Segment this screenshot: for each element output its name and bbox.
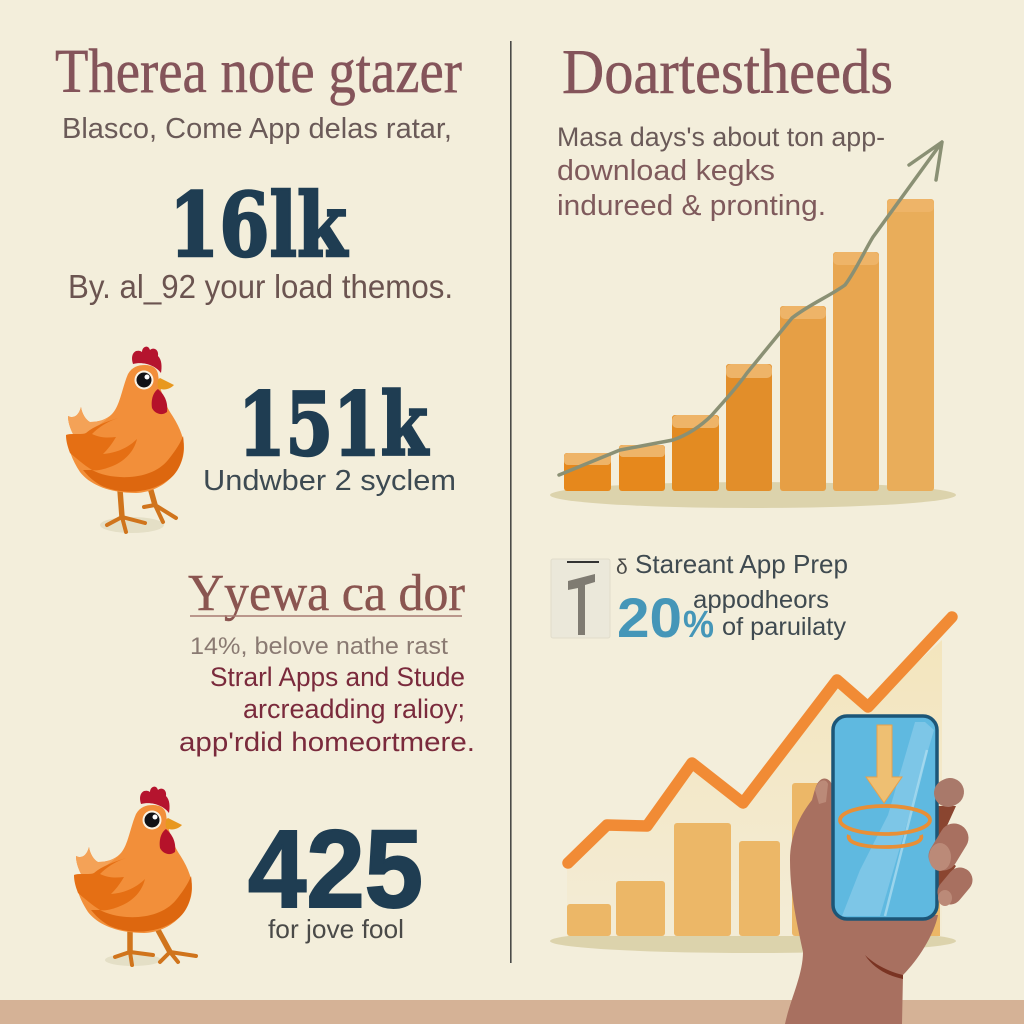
glyph: δ — [616, 556, 628, 579]
callout line one: appodheors — [693, 586, 829, 614]
intro line three: indureed & pronting. — [557, 190, 826, 222]
icon: chicken two — [74, 787, 196, 966]
phone — [833, 716, 937, 919]
footer band — [0, 1000, 1024, 1024]
intro line two: download kegks — [557, 155, 775, 187]
bar three — [672, 415, 719, 491]
intro line one: Masa days's about ton app- — [557, 122, 885, 152]
heading: left title: Therea note gtazer — [55, 38, 462, 106]
panel: 425 stat — [248, 808, 423, 944]
stat number: 151k — [238, 373, 429, 476]
bar six — [833, 252, 879, 491]
bar four — [726, 364, 772, 491]
panel: 151k stat — [203, 373, 456, 497]
body line two: Strarl Apps and Stude — [210, 662, 465, 692]
hand back — [936, 806, 956, 895]
panel: right top — [557, 36, 893, 222]
heading: right title: Doartestheeds — [562, 36, 893, 107]
stat caption: for jove fool — [268, 914, 404, 944]
body line three: arcreadding ralioy; — [243, 694, 465, 724]
bar — [616, 881, 665, 936]
bar seven — [887, 199, 934, 491]
bar — [739, 841, 780, 936]
download platter — [840, 806, 930, 847]
bar chart: rising bars with trend arrow — [550, 142, 956, 508]
bar — [792, 783, 837, 936]
panel: left top stats — [55, 38, 462, 305]
fingers — [929, 792, 960, 906]
percent value: % — [683, 604, 714, 646]
panel: left middle text — [179, 565, 475, 757]
bar — [674, 823, 731, 936]
icon: chicken one — [66, 347, 184, 533]
subheading: Yyewa ca dor — [188, 565, 465, 622]
bar two — [619, 445, 665, 491]
area chart: bars and orange line — [550, 617, 956, 953]
stat number: 425 — [248, 808, 423, 931]
trend line — [568, 617, 952, 863]
body line one: 14%, belove nathe rast — [190, 633, 448, 660]
underline flourish — [190, 615, 462, 617]
stat caption: Undwber 2 syclem — [203, 465, 456, 497]
callout line two: of paruilaty — [722, 613, 846, 641]
body line four: app'rdid homeortmere. — [179, 727, 475, 757]
bar — [567, 904, 611, 936]
palm crease — [865, 955, 903, 979]
stat: 16lk: 16lk — [169, 173, 349, 277]
icon: hand holding phone — [785, 716, 960, 1024]
icon: T card — [551, 559, 610, 638]
subtitle: Blasco, Come App delas ratar, — [62, 113, 452, 145]
percent value — [617, 586, 714, 649]
percent value: 20 — [617, 586, 682, 649]
bar five — [780, 306, 826, 491]
stat caption: By. al_92 your load themos. — [68, 268, 453, 305]
callout title: Stareant App Prep — [635, 549, 848, 579]
download arrow — [866, 725, 902, 803]
bar one — [564, 453, 611, 491]
panel: app prep callout — [551, 549, 848, 649]
thumb nail — [815, 780, 828, 804]
trend arrow — [559, 142, 942, 475]
column divider — [510, 41, 512, 963]
palm — [785, 779, 938, 1024]
